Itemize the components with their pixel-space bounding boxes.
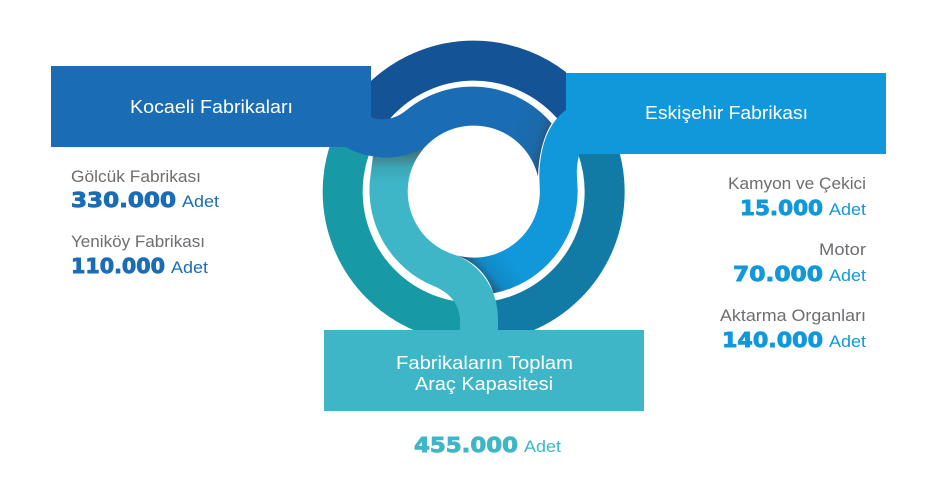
stat: Aktarma Organları: Aktarma Organları: [720, 307, 866, 325]
inner band: blue: [343, 87, 552, 177]
stat: Kamyon ve Çekici: Adet: [829, 201, 866, 219]
heading: Eskişehir Fabrikası: Eskişehir Fabrikası: [645, 102, 808, 123]
stat: Motor: 70.000: [733, 262, 823, 286]
inner band: sky blue: [453, 110, 579, 293]
stat: total 455.000: Adet: [524, 438, 561, 456]
panel: Kocaeli header: [51, 66, 371, 147]
heading: total capacity: [396, 352, 573, 394]
stat: Gölcük: Gölcük Fabrikası: [71, 168, 201, 186]
heading: total capacity: Fabrikaların Toplam: [396, 352, 573, 373]
stat: Kamyon ve Çekici: [728, 175, 866, 220]
stat: Yeniköy: 110.000: [71, 254, 165, 278]
stat: Motor: [733, 241, 867, 286]
stat: total 455.000: 455.000: [414, 433, 518, 457]
stat: Gölcük: [71, 168, 219, 212]
panel: total capacity header: [324, 330, 644, 411]
heading: Kocaeli Fabrikaları: Kocaeli Fabrikaları: [130, 96, 293, 117]
panel: Eskişehir header: [566, 73, 886, 154]
outer ring: teal segment: [322, 147, 460, 330]
stat: total 455.000: [414, 433, 561, 457]
inner band: teal: [369, 147, 498, 332]
stat: Yeniköy: Yeniköy Fabrikası: [71, 233, 205, 251]
heading: total capacity: Araç Kapasitesi: [415, 373, 553, 394]
stat: Motor: Adet: [829, 267, 866, 285]
outer ring: steel blue segment: [496, 154, 625, 330]
stat: Yeniköy: [71, 233, 208, 278]
stat: Gölcük: 330.000: [71, 188, 176, 212]
stat: Gölcük: Adet: [182, 193, 219, 211]
stat: Aktarma Organları: Adet: [829, 333, 866, 351]
stat: Aktarma Organları: 140.000: [722, 328, 823, 352]
stat: Aktarma Organları: [720, 307, 866, 352]
stat: Motor: Motor: [819, 241, 867, 259]
stat: Kamyon ve Çekici: 15.000: [740, 196, 823, 220]
ring diagram: [343, 61, 605, 332]
stat: Yeniköy: Adet: [171, 259, 208, 277]
outer ring: dark blue segment: [371, 40, 566, 120]
stat: Kamyon ve Çekici: Kamyon ve Çekici: [728, 175, 866, 193]
